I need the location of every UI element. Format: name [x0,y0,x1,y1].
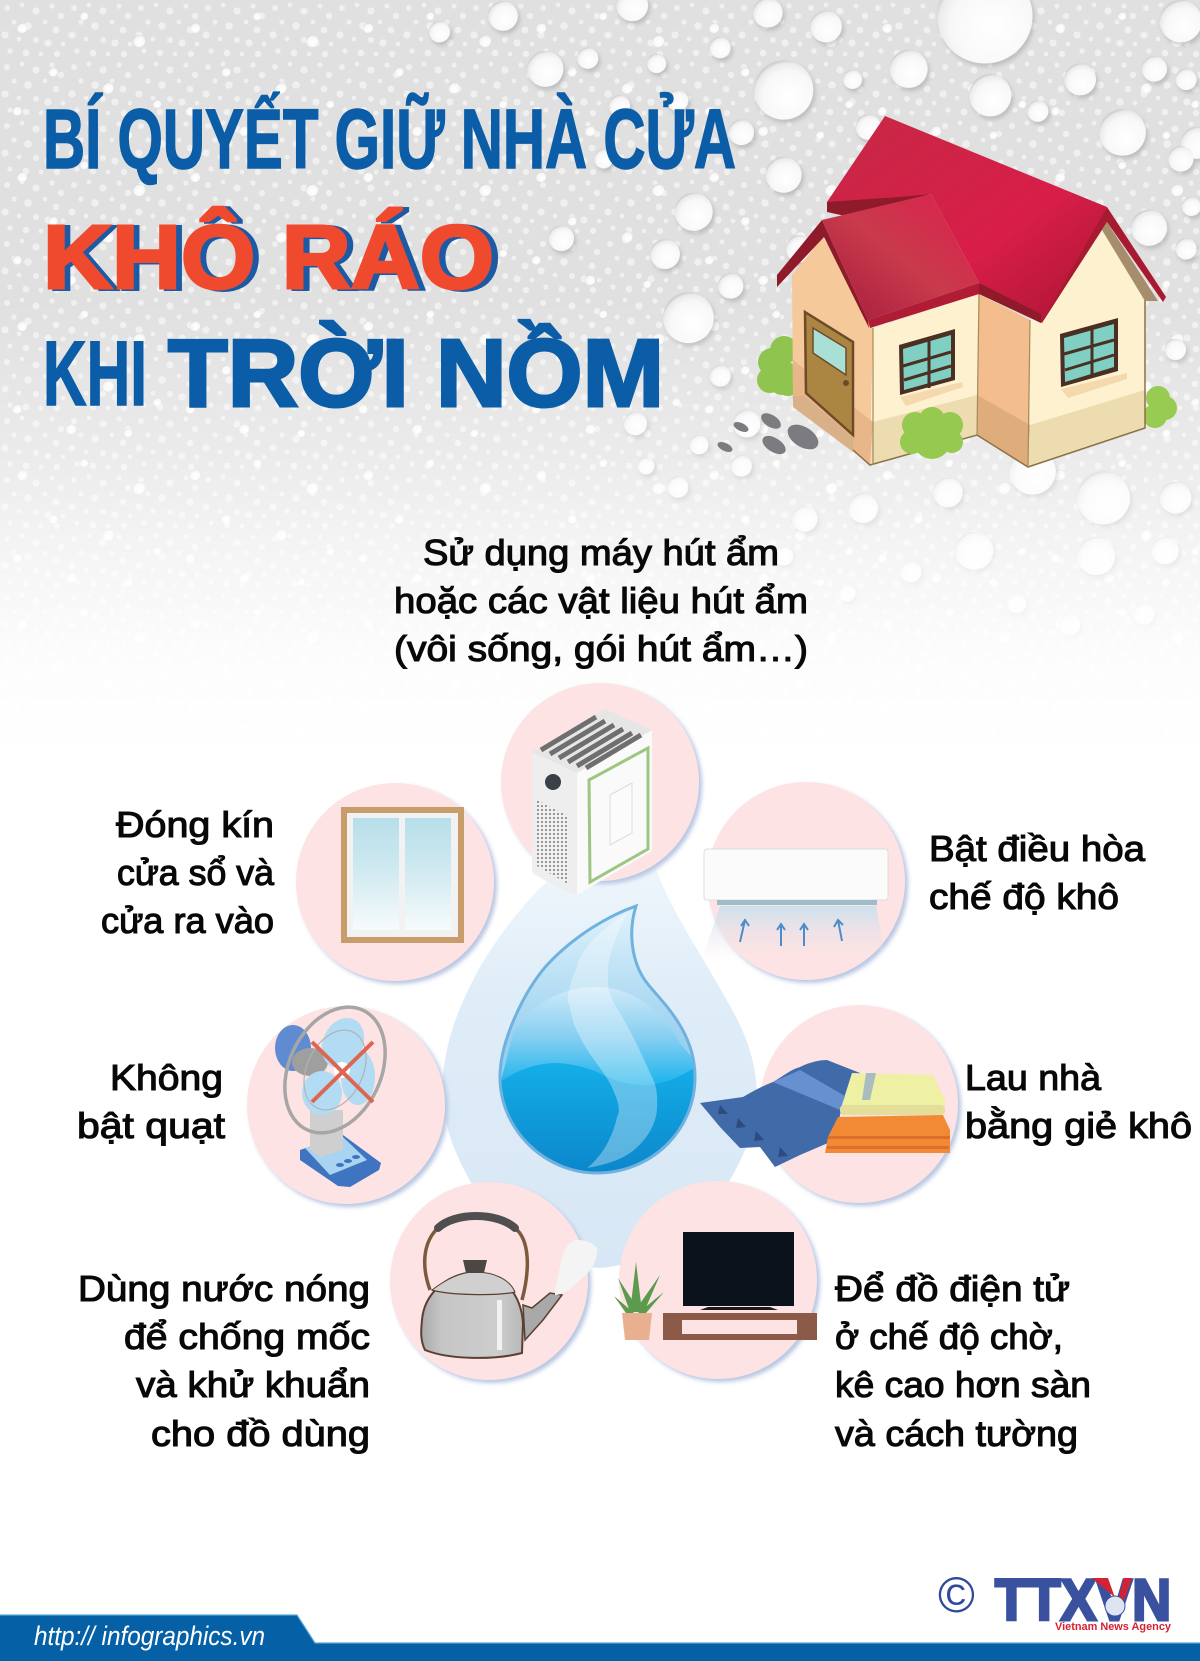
title line 2: KHÔ RÁO: KHÔ RÁO [48,207,500,309]
title line 2: KHÔ RÁO: KHÔ RÁO [43,206,494,308]
icon: dehumidifier [532,709,652,895]
text: dehumidifier tip [394,532,808,669]
panel: air conditioner [700,782,908,983]
icon: fan [265,991,405,1187]
text: air conditioner: chế độ khô [929,876,1119,917]
title [43,92,736,427]
right window [1060,318,1118,387]
text: close windows: cửa sổ và [117,852,275,893]
text: electronics: Để đồ điện tử [835,1268,1070,1309]
text: dehumidifier tip: Sử dụng máy hút ẩm [423,532,779,573]
text: dehumidifier tip: (vôi sống, gói hút ẩm…) [394,628,808,669]
logo: TTXVN copyright: TTXVN [995,1568,1171,1633]
panel: kettle [390,1182,598,1383]
front bush [900,407,963,459]
text: close windows: Đóng kín [116,804,274,845]
text: hot water: và khử khuẩn [136,1364,370,1405]
text: air conditioner [929,828,1146,917]
panel: window [296,783,497,984]
footer bar [0,1615,1200,1661]
icon: window [341,807,464,943]
title line 1: BÍ QUYẾT GIỮ NHÀ CỬA [43,92,736,186]
text: electronics: kê cao hơn sàn [835,1364,1091,1405]
text: dry cloth: Lau nhà [965,1057,1102,1098]
logo: TTXVN copyright: Vietnam News Agency [1055,1621,1172,1633]
text: fan [77,1057,225,1146]
text: electronics: ở chế độ chờ, [835,1316,1063,1357]
panel: fan [247,991,448,1207]
background: water droplets [0,0,1200,761]
icon: television and plant [614,1232,817,1340]
icon: cloths [700,1060,950,1167]
text: close windows [101,804,275,941]
pale drop halo [443,850,757,1268]
door [805,312,853,435]
text: hot water: Dùng nước nóng [78,1268,370,1309]
text: hot water [78,1268,370,1454]
title line 3: KHI [43,323,147,425]
text: dry cloth: bằng giẻ khô [965,1105,1192,1146]
panel: towels [700,1005,961,1206]
left window [899,329,955,395]
icon: air conditioner [700,849,888,965]
text: electronics [835,1268,1091,1454]
logo: TTXVN copyright: © [938,1567,975,1623]
panel: dehumidifier [501,683,702,895]
text: hot water: cho đồ dùng [151,1413,370,1454]
text: fan: bật quạt [77,1105,225,1146]
text: fan: Không [110,1057,223,1098]
walls [792,237,873,465]
roof [1102,222,1158,301]
illustration: house [716,116,1177,467]
text: dehumidifier tip: hoặc các vật liệu hút ẩm [394,580,808,621]
title line 3: TRỜI NỒM [168,319,664,427]
text: hot water: để chống mốc [124,1316,370,1357]
icon: kettle [421,1216,598,1358]
text: dry cloth [965,1057,1192,1146]
text: electronics: và cách tường [835,1413,1078,1454]
text: air conditioner: Bật điều hòa [929,828,1146,869]
footer url: http:// infographics.vn [34,1621,265,1651]
text: close windows: cửa ra vào [101,900,274,941]
bushes and stones [716,336,1177,458]
panel: television [614,1181,820,1382]
central water drop [495,900,700,1180]
